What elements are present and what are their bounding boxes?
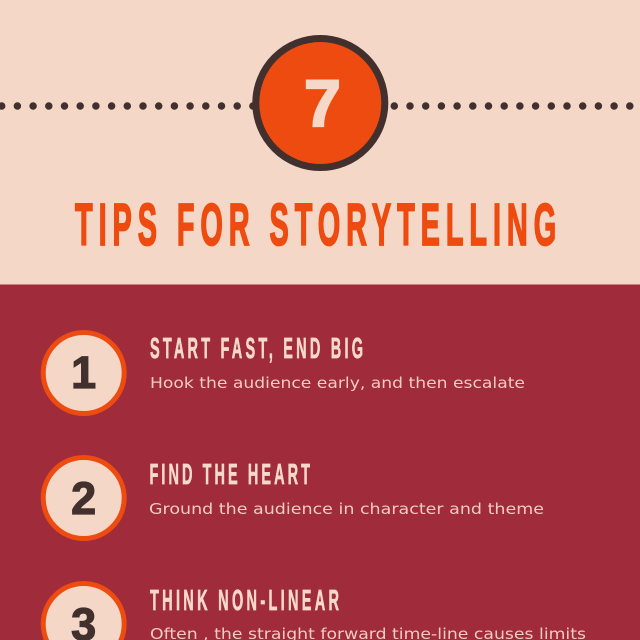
tip 2 heading: FIND THE HEART [150,457,310,490]
icon: number 3 badge [43,584,124,640]
tip 2 text: Ground the audience in character and theme [149,500,544,518]
title: TIPS FOR STORYTELLING [75,192,556,258]
icon: number 1 badge [43,332,124,414]
icon: number 2 badge: 2 [71,473,96,524]
panel: tips background [0,284,640,640]
icon: number 2 badge [43,458,124,538]
dotted line: right [394,102,640,110]
dotted line: left [2,102,254,110]
tip 1 heading: START FAST, END BIG [150,331,363,364]
tip 3 [43,583,586,640]
icon: number 1 badge: 1 [71,347,96,398]
tip 1 text: Hook the audience early, and then escalate [150,374,525,392]
badge: number 7 [256,38,385,168]
tip 2 [43,457,544,538]
panel: header background [0,0,640,284]
tip 3 heading: THINK NON-LINEAR [150,583,339,616]
badge: number 7: 7 [304,66,341,140]
tip 1 [43,331,525,414]
